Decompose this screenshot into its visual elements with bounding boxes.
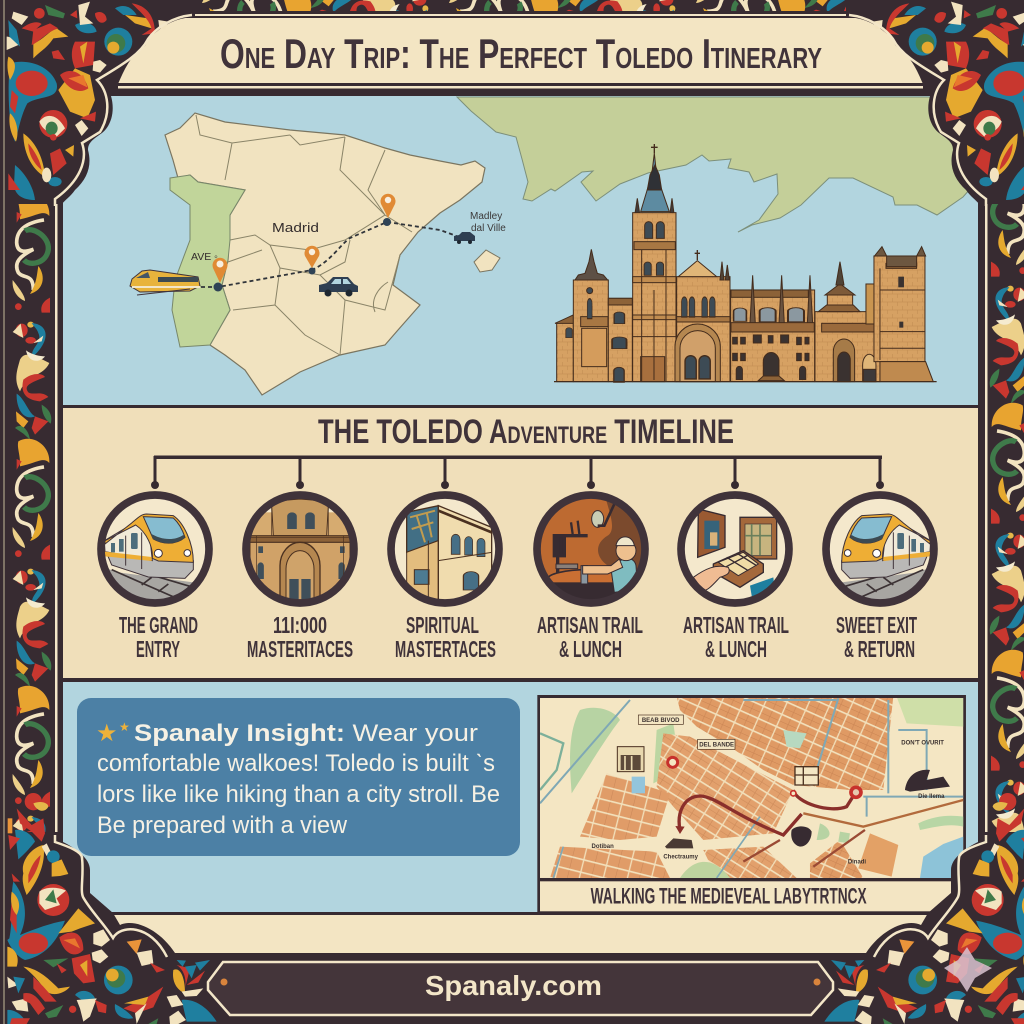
- step labels: & RETURN: [844, 636, 915, 662]
- step 4: artisan: [534, 492, 648, 606]
- city map inset: Die Ilema: [918, 794, 945, 800]
- corner ornament: top left: [0, 0, 195, 206]
- map: pin Lisbon: [212, 258, 228, 292]
- cream strip: [63, 915, 978, 953]
- city map inset: DON'T OVURIT: [901, 741, 944, 747]
- city map inset: [537, 695, 966, 913]
- city map inset: DEL BANDE: [699, 743, 734, 749]
- map: small car: [454, 232, 475, 244]
- city map inset: Dotiban: [592, 844, 614, 850]
- step labels: THE GRAND: [119, 612, 198, 638]
- step 2: cathedral facade: [243, 492, 357, 606]
- callout: insight: [77, 698, 520, 856]
- city map inset: BEAB BIVOD: [642, 718, 680, 724]
- map: Spain: [165, 113, 485, 395]
- city map inset: Dinadi: [848, 859, 866, 865]
- map: pin north: [381, 194, 396, 226]
- step labels: & LUNCH: [559, 636, 622, 662]
- step 3: decorated building: [388, 492, 502, 606]
- watermark star: [944, 947, 992, 992]
- timeline heading: THE TOLEDO Adventure TIMELINE: [318, 413, 734, 451]
- map: place label: Madley: [470, 211, 502, 222]
- step labels: SPIRITUAL: [406, 612, 479, 638]
- top ornamental border: [190, 0, 850, 11]
- map: Madrid label: Madrid: [272, 220, 319, 235]
- cathedral illustration: [554, 144, 937, 382]
- callout: insight: lors like like hiking than a city stroll. Be: [97, 781, 500, 808]
- title panel: [100, 14, 940, 88]
- map: route: [180, 222, 462, 287]
- step labels: MASTERTACES: [395, 636, 496, 662]
- map: AVE label: AVE ◦: [191, 251, 218, 263]
- step labels: [119, 612, 917, 662]
- right ornamental border: [985, 190, 1024, 850]
- footer banner: [208, 962, 833, 1015]
- corner ornament: bottom left: [0, 793, 232, 1024]
- divider line: [63, 678, 978, 682]
- map: island: [474, 250, 500, 272]
- footer text: Spanaly.com: [425, 970, 602, 1001]
- left ornamental border: [7, 190, 58, 850]
- title text: One Day Trip: The Perfect Toledo Itinerary: [220, 30, 822, 77]
- lower panel: [63, 682, 978, 915]
- divider line: [63, 405, 978, 408]
- step labels: ENTRY: [136, 636, 180, 662]
- step labels: SWEET EXIT: [836, 612, 917, 638]
- left edge line: [3, 0, 5, 1024]
- callout: insight: Be prepared with a view: [97, 812, 348, 839]
- timeline panel: [63, 408, 978, 678]
- map: car: [319, 277, 358, 296]
- step labels: MASTERITACES: [247, 636, 353, 662]
- map panel: [63, 96, 978, 406]
- callout: insight: ★: [119, 720, 130, 734]
- corner ornament: top right: [846, 0, 1024, 206]
- step labels: ARTISAN TRAIL: [683, 612, 789, 638]
- city map inset: Chectraumy: [663, 855, 699, 861]
- inset caption: WALKING THE MEDIEVEAL LABYTRTNCX: [591, 883, 867, 908]
- step labels: ARTISAN TRAIL: [537, 612, 643, 638]
- timeline connectors: [151, 456, 884, 489]
- step 1: train: [98, 492, 212, 606]
- step labels: & LUNCH: [705, 636, 767, 662]
- map: pin centre: [305, 246, 320, 274]
- step labels: 11I:000: [273, 612, 327, 638]
- callout: insight: comfortable walkoes! Toledo is built ˋs: [97, 750, 495, 777]
- step 6: train: [823, 492, 937, 606]
- map: France coast: [457, 97, 978, 232]
- map: Portugal: [170, 175, 245, 347]
- step 5: hand and box: [678, 492, 792, 606]
- map: place label: dal Ville: [471, 223, 506, 234]
- map: train: [130, 270, 200, 295]
- callout: insight: Spanaly Insight: Wear your: [134, 720, 478, 747]
- callout: insight: ★: [96, 720, 118, 747]
- corner ornament: bottom right: [809, 793, 1024, 1024]
